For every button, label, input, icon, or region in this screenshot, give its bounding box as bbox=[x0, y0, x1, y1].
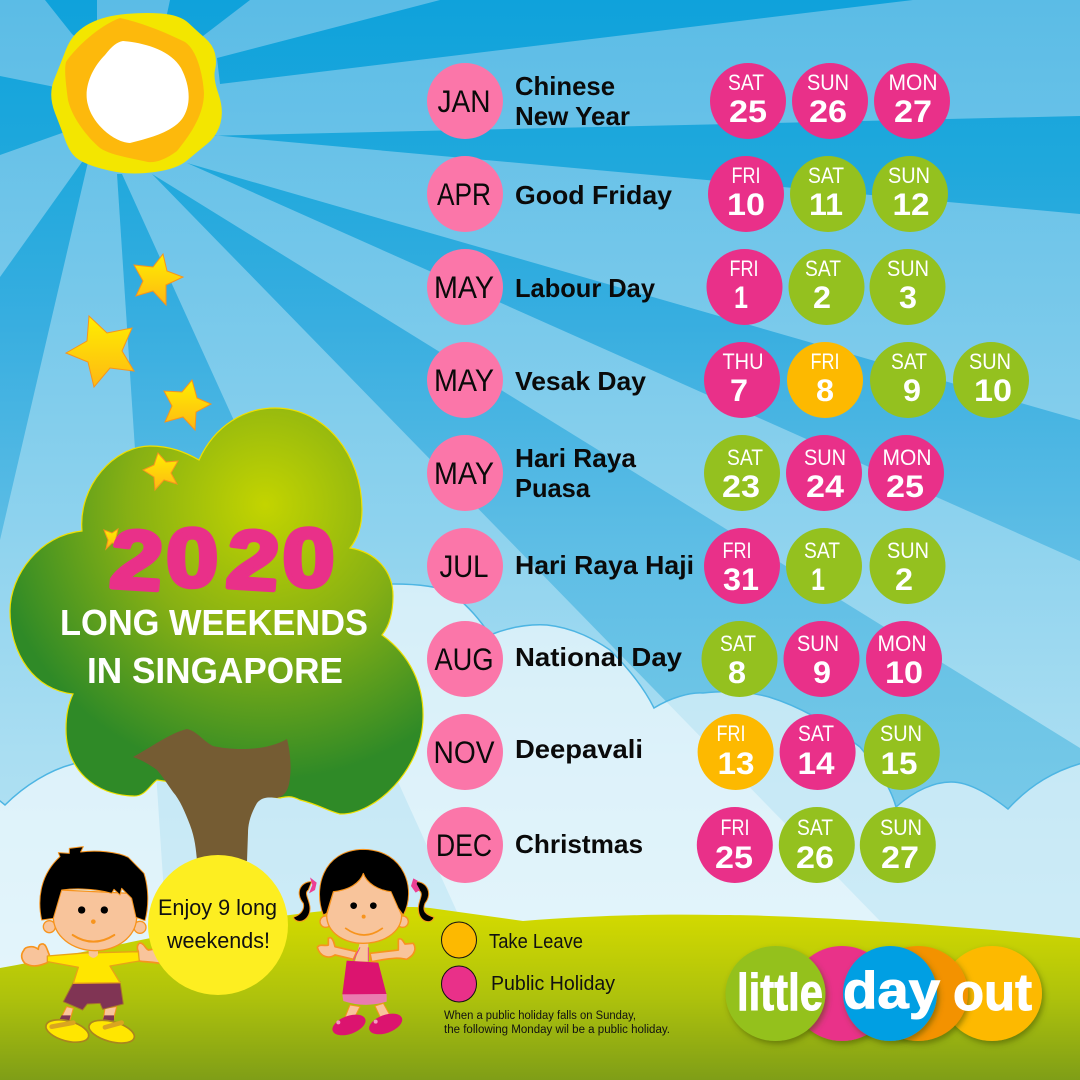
date: Mon 27 bbox=[874, 63, 950, 139]
boy character bbox=[22, 847, 160, 1047]
date: Sun 26: SUN bbox=[807, 70, 849, 95]
date: Sun 9: 9 bbox=[813, 654, 831, 690]
legend: take leave bbox=[442, 922, 583, 958]
date: Sat 11 bbox=[790, 156, 866, 232]
date: Sat 23: 23 bbox=[722, 468, 760, 504]
row: May, Hari Raya Puasa bbox=[427, 435, 944, 511]
holiday name: Christmas bbox=[515, 829, 643, 859]
holiday name: Vesak Day bbox=[515, 366, 647, 396]
month badge: JAN bbox=[438, 83, 490, 119]
date: Sat 11: SAT bbox=[808, 163, 844, 188]
tree bbox=[10, 408, 423, 861]
icon: sun bbox=[51, 13, 222, 174]
row: November, Deepavali bbox=[427, 714, 940, 790]
holiday name bbox=[515, 443, 637, 503]
date: Fri 8 bbox=[787, 342, 863, 418]
date: Sat 2 bbox=[788, 249, 864, 325]
date: Sat 8: SAT bbox=[720, 631, 756, 656]
legend: take leave: Take Leave bbox=[489, 931, 583, 953]
month badge bbox=[427, 63, 503, 139]
holiday name: Chinese bbox=[515, 71, 615, 101]
icon: star on tree bbox=[143, 453, 178, 490]
legend: public holiday: Public Holiday bbox=[491, 973, 615, 995]
date: Fri 1 bbox=[706, 249, 782, 325]
logo: little day out: day bbox=[843, 962, 940, 1020]
month badge bbox=[427, 621, 503, 697]
date: Sun 12: SUN bbox=[888, 163, 930, 188]
footnote: When a public holiday falls on Sunday, bbox=[444, 1010, 636, 1022]
date: Sat 8: 8 bbox=[728, 654, 746, 690]
girl character bbox=[293, 849, 434, 1039]
row: July, Hari Raya Haji bbox=[427, 528, 946, 604]
month badge: MAY bbox=[434, 362, 494, 398]
row: April, Good Friday bbox=[427, 156, 948, 232]
date: Sat 23: SAT bbox=[727, 445, 763, 470]
date: Sat 25 bbox=[710, 63, 786, 139]
holiday name: Good Friday bbox=[515, 180, 673, 210]
date: Sun 12 bbox=[872, 156, 948, 232]
icon: small star behind numerals bbox=[104, 529, 121, 549]
title line 1: LONG WEEKENDS bbox=[60, 602, 368, 643]
date: Sun 10: SUN bbox=[969, 349, 1011, 374]
date: Thu 7: 7 bbox=[730, 372, 748, 408]
month badge bbox=[427, 342, 503, 418]
date: Sat 9: 9 bbox=[903, 372, 921, 408]
clouds bbox=[0, 584, 1080, 1080]
date: Mon 27: MON bbox=[888, 70, 938, 95]
holiday name: Hari Raya Haji bbox=[515, 550, 694, 580]
date: Sat 1 bbox=[786, 528, 862, 604]
date: Sat 23 bbox=[704, 435, 780, 511]
callout: enjoy 9 long weekends: Enjoy 9 long bbox=[158, 895, 277, 920]
date: Fri 13: 13 bbox=[718, 745, 754, 781]
date: Sun 24: 24 bbox=[806, 468, 845, 504]
date: Mon 10 bbox=[866, 621, 942, 697]
icon: stars above tree bbox=[66, 254, 211, 430]
month badge: MAY bbox=[434, 455, 494, 491]
month badge bbox=[427, 156, 503, 232]
footnote: the following Monday wil be a public holiday. bbox=[444, 1024, 670, 1036]
holiday name: National Day bbox=[515, 642, 683, 672]
date: Mon 10: 10 bbox=[885, 654, 923, 690]
date: Thu 7: THU bbox=[722, 349, 764, 374]
row: May, Vesak Day bbox=[427, 342, 1029, 418]
logo: little day out bbox=[726, 946, 1042, 1041]
date: Sun 10 bbox=[953, 342, 1029, 418]
date: Sun 27: 27 bbox=[881, 839, 919, 875]
row: January, Chinese New Year bbox=[427, 63, 950, 139]
legend bbox=[442, 922, 670, 1036]
date: Sun 10: 10 bbox=[974, 372, 1012, 408]
date: Sun 24: SUN bbox=[804, 445, 846, 470]
date: Fri 10 bbox=[708, 156, 784, 232]
date: Mon 27: 27 bbox=[894, 93, 932, 129]
date: Fri 25 bbox=[697, 807, 773, 883]
date: Sat 25: SAT bbox=[728, 70, 764, 95]
date: Fri 1: FRI bbox=[730, 256, 758, 281]
date: Sun 26 bbox=[792, 63, 868, 139]
date: Sun 15 bbox=[864, 714, 940, 790]
date: Fri 31: 31 bbox=[723, 561, 759, 597]
date: Sun 27 bbox=[860, 807, 936, 883]
date: Sun 9: SUN bbox=[797, 631, 839, 656]
date: Sat 26 bbox=[779, 807, 855, 883]
hill bbox=[0, 907, 1080, 1080]
date: Fri 13: FRI bbox=[716, 721, 746, 746]
date: Sun 24 bbox=[786, 435, 862, 511]
date: Sat 2: SAT bbox=[805, 256, 841, 281]
callout: enjoy 9 long weekends bbox=[148, 855, 288, 995]
title line 2: IN SINGAPORE bbox=[87, 650, 343, 691]
date: Sat 14 bbox=[780, 714, 856, 790]
holiday name: Puasa bbox=[515, 473, 591, 503]
date: Sun 15: 15 bbox=[880, 745, 918, 781]
month badge: NOV bbox=[434, 734, 494, 770]
date: Fri 8: 8 bbox=[816, 372, 834, 408]
month badge bbox=[427, 435, 503, 511]
date: Sat 1: 1 bbox=[811, 561, 825, 597]
date: Sat 1: SAT bbox=[804, 538, 840, 563]
date: Fri 10: FRI bbox=[732, 163, 760, 188]
date: Sat 14: SAT bbox=[798, 721, 834, 746]
month badge bbox=[427, 714, 503, 790]
date: Mon 25: MON bbox=[882, 445, 932, 470]
month badge: APR bbox=[437, 176, 491, 212]
date: Sun 15: SUN bbox=[880, 721, 922, 746]
holiday name: Deepavali bbox=[515, 734, 643, 764]
date: Fri 8: FRI bbox=[810, 349, 840, 374]
month badge bbox=[427, 249, 503, 325]
date: Fri 25: 25 bbox=[715, 839, 753, 875]
date: Fri 25: FRI bbox=[720, 815, 750, 840]
date: Sat 2: 2 bbox=[813, 279, 831, 315]
month badge: MAY bbox=[434, 269, 494, 305]
holiday name: Hari Raya bbox=[515, 443, 637, 473]
date: Sun 9 bbox=[784, 621, 860, 697]
date: Sun 2: SUN bbox=[887, 538, 929, 563]
date: Fri 13 bbox=[698, 714, 774, 790]
date: Sat 8 bbox=[702, 621, 778, 697]
holiday name: New Year bbox=[515, 101, 630, 131]
date: Mon 25: 25 bbox=[886, 468, 924, 504]
month badge bbox=[427, 807, 503, 883]
date: Fri 31: FRI bbox=[722, 538, 752, 563]
date: Sun 2 bbox=[870, 528, 946, 604]
date: Sat 26: 26 bbox=[796, 839, 834, 875]
month badge bbox=[427, 528, 503, 604]
footnote bbox=[444, 1010, 670, 1036]
callout: enjoy 9 long weekends: weekends! bbox=[166, 928, 270, 953]
date: Fri 10: 10 bbox=[727, 186, 765, 222]
holiday name bbox=[515, 71, 630, 131]
date: Sun 3: SUN bbox=[887, 256, 929, 281]
date: Thu 7 bbox=[704, 342, 780, 418]
month badge: DEC bbox=[436, 827, 492, 863]
date: Sun 27: SUN bbox=[880, 815, 922, 840]
month badge: AUG bbox=[434, 641, 494, 677]
date: Mon 10: MON bbox=[878, 631, 926, 656]
date: Sat 26: SAT bbox=[797, 815, 833, 840]
date: Sat 9: SAT bbox=[891, 349, 927, 374]
logo: little day out: little bbox=[737, 964, 823, 1022]
row: August, National Day bbox=[427, 621, 942, 697]
title year: 2020 bbox=[107, 511, 335, 608]
month badge: JUL bbox=[440, 548, 488, 584]
date: Fri 31 bbox=[704, 528, 780, 604]
legend: public holiday bbox=[442, 966, 615, 1002]
row: December, Christmas bbox=[427, 807, 936, 883]
date: Sat 25: 25 bbox=[729, 93, 767, 129]
date: Mon 25 bbox=[868, 435, 944, 511]
holiday name: Labour Day bbox=[515, 273, 656, 303]
date: Sun 26: 26 bbox=[809, 93, 847, 129]
date: Sun 2: 2 bbox=[895, 561, 913, 597]
logo: little day out: out bbox=[953, 964, 1032, 1022]
date: Sat 11: 11 bbox=[809, 186, 843, 222]
date: Sun 3: 3 bbox=[899, 279, 917, 315]
date: Sat 14: 14 bbox=[798, 745, 835, 781]
date: Sun 3 bbox=[870, 249, 946, 325]
title bbox=[60, 511, 368, 691]
row: May, Labour Day bbox=[427, 249, 946, 325]
date: Sun 12: 12 bbox=[892, 186, 930, 222]
date: Fri 1: 1 bbox=[734, 279, 748, 315]
date: Sat 9 bbox=[870, 342, 946, 418]
